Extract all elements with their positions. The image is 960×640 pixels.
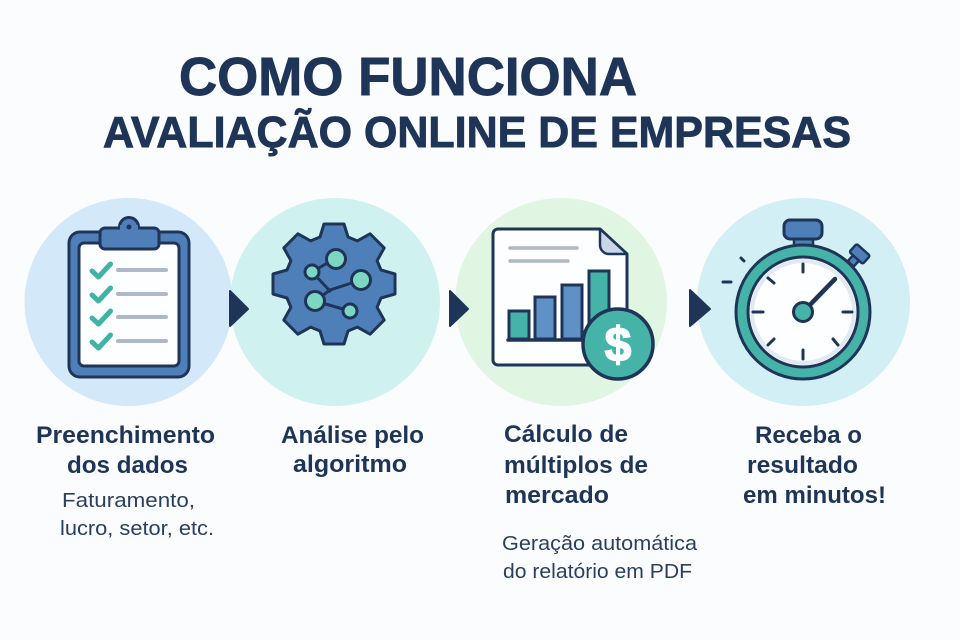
icon: stopwatch <box>723 220 870 379</box>
icon: gear with network <box>273 224 395 344</box>
step 1 heading: Preenchimento <box>36 422 215 449</box>
step 4 heading: Receba o <box>755 422 862 449</box>
step 3 background circle <box>455 198 667 406</box>
step 3 description <box>502 533 698 583</box>
arrow 3 <box>690 290 710 326</box>
step 3 heading <box>504 421 648 509</box>
step 3 description: Geração automática <box>502 533 698 555</box>
step 1 heading <box>36 422 215 479</box>
icon: report with bar chart and dollar coin <box>493 229 653 379</box>
step 3 description: do relatório em PDF <box>503 561 692 583</box>
step 1 heading: dos dados <box>67 452 188 479</box>
step 1 description <box>60 490 214 540</box>
step 3 heading: mercado <box>505 482 609 509</box>
step 4 background circle <box>697 198 910 406</box>
step 4 heading: resultado <box>747 452 858 479</box>
icon: clipboard checklist <box>69 218 189 377</box>
step 1 background circle <box>24 198 232 406</box>
step 3 heading: múltiplos de <box>504 452 648 479</box>
step 3 heading: Cálculo de <box>504 421 628 448</box>
title: COMO FUNCIONA <box>179 47 637 107</box>
arrow 1 <box>230 291 248 326</box>
step 2 heading: Análise pelo <box>281 422 424 449</box>
step 1 description: Faturamento, <box>62 490 195 512</box>
icon: report with bar chart and dollar coin: $ <box>605 319 632 372</box>
arrow 2 <box>450 291 468 326</box>
title: AVALIAÇÃO ONLINE DE EMPRESAS <box>103 107 851 157</box>
title <box>103 47 851 157</box>
step 1 description: lucro, setor, etc. <box>60 518 214 540</box>
step 4 heading: em minutos! <box>743 482 886 509</box>
step 4 heading <box>743 422 886 509</box>
step 2 heading: algoritmo <box>293 451 407 478</box>
step 2 background circle <box>230 198 440 406</box>
step 2 heading <box>281 422 424 478</box>
